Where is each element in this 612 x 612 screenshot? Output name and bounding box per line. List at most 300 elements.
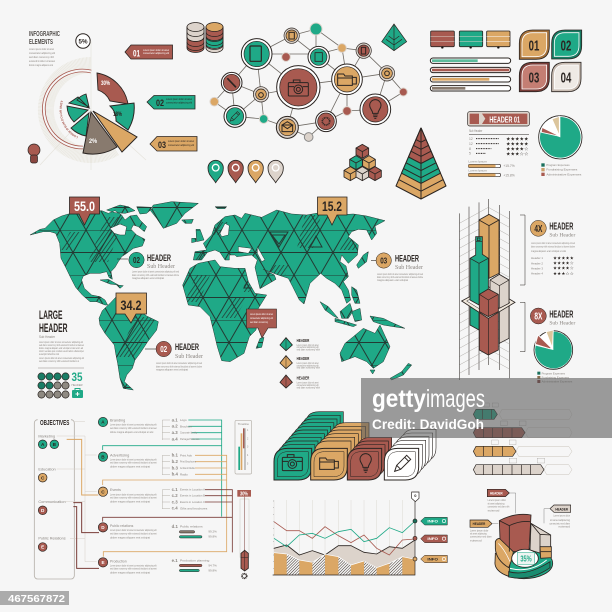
tag: header light (544, 505, 571, 529)
legend: map pyramids: consectetur adipiscing elit (297, 384, 319, 387)
node: bulb (360, 94, 391, 125)
wedge: gray 2%: 2% (89, 139, 98, 145)
node B advertising: dolore magna aliquam erat volutpat (110, 466, 150, 469)
callout: 55.0 (70, 197, 100, 225)
sub-item labels: Events in Location A (180, 488, 205, 492)
node A branding: dolore magna aliquam erat volutpat ut wisi (110, 431, 154, 434)
info tag tan: INFO (427, 557, 438, 561)
pie chart (534, 330, 573, 369)
tag: header light: consectetur sed diam (549, 523, 570, 526)
node E production: sed diam nonummy nibh euismod tincidunt ut laoreet (110, 568, 157, 571)
ratings table: +15.7% (503, 164, 515, 168)
node C events: C (101, 489, 105, 494)
node: folder (332, 64, 362, 95)
label: 4X header: 4X (534, 224, 543, 235)
objectives flow diagram (34, 417, 252, 579)
watermark banner: Credit: DavidGoh (372, 416, 484, 432)
sub-item labels: Packaged Materials (180, 437, 200, 441)
sub-item labels: Print Brochures (180, 460, 196, 464)
large header block: Lorem ipsum dolor sit amet consectetur adipiscing elit (39, 357, 84, 360)
node: gear (316, 111, 336, 132)
watermark banner: getty (372, 385, 426, 413)
leaf tile 02: 02 (561, 38, 571, 54)
large header block: HEADER (39, 323, 68, 335)
connectors (57, 420, 232, 568)
sub-item labels: Events in Location C (180, 500, 206, 504)
node E production: dolore magna aliquam erat volutpat (110, 572, 150, 575)
label: 4X header: Header 2 (531, 261, 543, 265)
label: 4X header: ★★★★☆ (553, 266, 574, 271)
node D public relations: Lorem ipsum dolor sit amet consectetur adipiscing elit (110, 529, 157, 532)
sub-item labels: b.2 (172, 459, 179, 464)
node: microphone (221, 72, 242, 93)
map label: 03 header tan: Sub Header (395, 265, 423, 271)
legend: map pyramids: HEADER (297, 356, 310, 362)
percent badge: 5%: 5% (78, 38, 88, 46)
world map (30, 201, 412, 390)
title: infographic elements: euismod tincidunt ut laoreet (29, 59, 55, 63)
sub-item labels (172, 417, 217, 572)
node D public relations: sed diam nonummy nibh euismod tincidunt ut laoreet (110, 532, 157, 535)
tag 02 (147, 96, 195, 109)
map label: 03 header tan: magna aliquam erat volutpat (377, 279, 408, 282)
map label: 03 header tan: diam nonummy nibh euismod tincidunt ut laoreet dolore (377, 276, 424, 279)
node C events: dolore magna aliquam erat volutpat (110, 501, 150, 504)
sub-item labels: c.1 (172, 487, 178, 492)
legend: map pyramids: HEADER (297, 338, 310, 344)
sub-item labels: Radio (180, 472, 188, 476)
hex row tan (473, 446, 572, 456)
callout: red text note: sed diam nonummy (250, 321, 269, 324)
node: document (308, 46, 329, 68)
node D public relations: D (101, 525, 105, 530)
ratings table: ★★★☆☆ (506, 151, 529, 157)
network diagram (208, 23, 407, 183)
ratings table: Sub Header (469, 129, 483, 133)
objectives side panel: B (53, 442, 57, 447)
tag 01: 01 (133, 48, 140, 58)
tag: header tan: HEADER (473, 521, 485, 526)
legend: map pyramids: HEADER (297, 375, 310, 381)
ratings table: ★★★★★ (506, 137, 529, 143)
legend: map pyramids: consectetur adipiscing elit (297, 346, 319, 349)
sub-item labels: e.1 (172, 558, 178, 563)
tag: header red: consectetur sed diam nibh (488, 505, 510, 508)
green bar (470, 237, 488, 310)
sub-item labels: Logo (180, 418, 187, 422)
map label: 02 header green: Sub Header (147, 264, 175, 270)
node E production (98, 558, 157, 575)
pie legend (541, 163, 582, 176)
node E production: E (101, 560, 105, 565)
node A branding: A (101, 420, 105, 425)
sub-item labels: Brochure (180, 424, 192, 428)
title: infographic elements: Lorem ipsum dolor sit amet (29, 47, 54, 51)
map label: 03 header tan (371, 253, 424, 282)
node C events (98, 487, 157, 504)
thermometer 30%: 30% (240, 491, 248, 497)
leaf tile 01 (519, 30, 549, 59)
timeline mini chart: 3 (247, 447, 249, 449)
info tag red (421, 535, 447, 543)
people icon grid with 35: 35 (72, 370, 83, 384)
3D donut chart (495, 514, 553, 579)
people icon grid with 35: HEADER (72, 384, 83, 387)
coin stacks (187, 22, 223, 52)
node C events: Events (110, 488, 121, 492)
sub-item labels: c.2 (172, 493, 178, 498)
large header block: Lorem ipsum dolor sit amet consectetur adipiscing elit (39, 341, 83, 344)
red bar (479, 289, 498, 317)
title: infographic elements (29, 29, 60, 67)
objectives side panel: A (41, 442, 45, 447)
map label: 02 header red: HEADER (175, 342, 199, 353)
map label: 02 header green: 02 (133, 255, 140, 265)
label: 4X header: Header 4 (531, 272, 543, 276)
node E production: Lorem ipsum dolor sit amet consectetur adipiscing elit (110, 564, 157, 567)
sub-item labels: Gifts and brochures (180, 506, 208, 510)
title: infographic elements: consectetur adipiscing elit (29, 51, 55, 55)
node D public relations (98, 523, 157, 539)
info tag tan (421, 555, 447, 563)
ratings table: 12 (469, 137, 473, 141)
legend: map pyramids: sed diam nonummy nibh (297, 388, 321, 390)
donut center label 35%: 35% (520, 554, 532, 564)
wedge: red 30%: 30% (101, 81, 110, 87)
ratings table: 8 (469, 147, 471, 151)
pie legend: Fundraising Expenses (546, 168, 578, 172)
label: 8X header: HEADER (549, 309, 573, 320)
objectives side panel (34, 418, 74, 579)
hex row red (473, 428, 572, 438)
map label: 02 header green (117, 252, 180, 280)
tag: header tan (470, 520, 498, 543)
timeline mini chart: 1 (247, 430, 249, 432)
timeline mini chart: 2 (247, 438, 249, 440)
image id (0, 591, 69, 605)
tag: header red: euismod (488, 510, 500, 512)
hex row green (473, 409, 572, 419)
lower bars (470, 305, 479, 330)
large header block: minim veniam quis nostrud exerci tation ullamcorper (39, 350, 84, 353)
timeline mini chart: 4 (247, 455, 249, 457)
ratings table: +15.8% (503, 173, 515, 177)
objectives side panel: Communication (38, 500, 66, 504)
light bar (490, 274, 509, 308)
map label: 02 header green: diam nonummy nibh euismod tincidunt ut laoreet dolore (132, 274, 180, 277)
callout: 34.2: 34.2 (120, 297, 142, 313)
title: infographic elements: dolore magna aliquam erat (29, 63, 53, 67)
tag 01: consectetur adipiscing elit (143, 52, 169, 55)
wedges: left green (67, 94, 89, 136)
sub-item labels: 99.2% (208, 530, 217, 534)
objectives side panel: E (41, 545, 44, 550)
title: infographic elements: ELEMENTS (29, 37, 53, 46)
info tag red: INFO (427, 537, 438, 541)
axis pin: 0 (414, 493, 417, 498)
white tile stack (384, 429, 436, 480)
isometric cube pyramid (344, 144, 381, 181)
tile stacks and line chart (273, 412, 447, 575)
people icon grid with 35 (38, 368, 84, 398)
tag: header tan: euismod (470, 541, 483, 543)
sub-item labels: Public relations (180, 525, 203, 529)
donut center label 35% (517, 552, 535, 564)
ratings table: 5 (469, 152, 471, 156)
node B advertising: B (101, 454, 105, 459)
label: 4X header: ★★★★★ (553, 255, 574, 260)
legend: map pyramids: Lorem ipsum dolor sit amet (297, 344, 319, 347)
tag 03: Lorem ipsum dolor sit amet (168, 140, 194, 143)
ratings table: Lorem Ipsum (468, 159, 488, 163)
header 01 banner: HEADER 01 (489, 114, 520, 124)
sub-item labels: Print Ads (180, 453, 192, 457)
top right: striped boxes (430, 30, 582, 177)
tag: header tan: sit amet adipiscing (470, 532, 487, 535)
location pins (208, 160, 283, 183)
callout: 55.0: 55.0 (74, 198, 95, 214)
wedge: tan (93, 111, 137, 152)
node E production: Production (110, 559, 127, 563)
objectives side panel: OBJECTIVES (40, 418, 69, 427)
leaf tile 02 (552, 30, 582, 59)
callout: 15.2 (318, 197, 347, 225)
leaf tile 04: 04 (561, 70, 572, 86)
label: 4X header (530, 220, 576, 276)
label: 4X header: Header 3 (531, 266, 543, 270)
label: 4X header: magna aliquam erat volutpat ut wisi (531, 250, 566, 253)
sub-item labels: a.2 (172, 424, 178, 429)
node B advertising: Advertising (110, 453, 129, 457)
legend: map pyramids: Lorem ipsum dolor sit amet (297, 362, 319, 365)
callout: red text note: consectetur adipiscing elit (250, 317, 273, 320)
info tag green: INFO (427, 519, 438, 523)
green tile stack (274, 412, 343, 480)
pie legend: Program Expenses (542, 371, 565, 375)
tag: header tan: Lorem ipsum dolor (470, 530, 489, 533)
tag 01 (125, 45, 172, 59)
leaf tile 03: 03 (529, 70, 539, 86)
node: camera (277, 66, 320, 109)
node: book (241, 39, 272, 69)
tag 02: 02 (156, 98, 164, 108)
node B advertising (98, 452, 157, 469)
line chart (273, 492, 447, 575)
pie legend: Administrative Expenses (546, 172, 582, 176)
sub-item labels: Ambient Media (180, 466, 195, 470)
watermark banner (361, 378, 612, 438)
sub-item labels: 94.7% (208, 563, 217, 567)
legend: map pyramids: Lorem ipsum dolor sit amet (297, 382, 319, 385)
tag: header red: HEADER (490, 490, 503, 495)
timeline mini chart: Timeline (238, 422, 249, 426)
label: 4X header: HEADER (549, 222, 573, 233)
map label: 03 header tan: HEADER (395, 254, 419, 264)
legend: map pyramids (280, 338, 321, 390)
label: 4X header: ★★★★☆ (553, 261, 574, 266)
small nodes (210, 23, 407, 141)
sub-item labels: a.3 (172, 430, 178, 435)
stepped pyramid (396, 128, 446, 199)
node D public relations: Public relations (110, 524, 133, 528)
objectives side panel: C (41, 475, 45, 480)
map label: 02 header green: magna aliquam erat volutpat (132, 277, 164, 280)
timeline mini chart: 5 (247, 463, 249, 465)
map label: 03 header tan: 03 (380, 256, 387, 266)
label: 4X header: Lorem ipsum dolor sit amet consectetur adipiscing elit sed (531, 242, 576, 245)
objectives side panel: D (41, 508, 45, 513)
large header block: LARGE (39, 310, 63, 322)
pie chart expenses (539, 116, 582, 159)
sub-item labels: 99.8% (208, 535, 217, 539)
node C events: Lorem ipsum dolor sit amet consectetur adipiscing elit (110, 493, 157, 496)
thermometer 30% (237, 490, 251, 578)
sub-item labels: b.1 (172, 453, 179, 458)
node B advertising: sed diam nonummy nibh euismod tincidunt ut laoreet (110, 462, 157, 465)
node A branding (98, 417, 157, 434)
leaf tile 01: 01 (529, 38, 539, 54)
sub-item labels: a.4 (172, 436, 178, 441)
tag: header light: HEADER (555, 506, 568, 511)
sub-item labels: Production planning (180, 559, 210, 563)
polar pie chart (38, 41, 146, 170)
leaf tile 04 (552, 62, 581, 92)
info tag green (421, 517, 447, 525)
platform (462, 287, 515, 318)
large header block: Sub Header (39, 335, 56, 339)
tag 03: 03 (158, 140, 166, 150)
map label: 02 header red: magna aliquam erat volutpat (156, 368, 188, 372)
sub-item labels: b.4 (172, 472, 179, 477)
callout: red text note: Lorem ipsum dolor sit amet (250, 313, 273, 316)
progress bars (179, 531, 202, 572)
progress bars (430, 58, 511, 91)
legend: map pyramids: sed diam nonummy nibh (297, 368, 321, 370)
node D public relations: dolore magna aliquam erat volutpat (110, 536, 150, 539)
sub-item labels: 99.8% (208, 568, 217, 572)
sub-item labels: Events in Location B (180, 494, 205, 498)
tag: header light: Lorem ipsum dolor (553, 515, 570, 518)
large header block: sed diam nonummy nibh euismod tincidunt ut (39, 360, 79, 363)
tan tile stack (311, 423, 369, 480)
small pyramid (382, 24, 407, 51)
sub-item labels: c.4 (172, 506, 178, 511)
title: infographic elements: INFOGRAPHIC (29, 29, 60, 38)
label: 4X header: ★★★☆☆ (553, 271, 574, 276)
sub-item labels: b.3 (172, 465, 179, 470)
node A branding: Lorem ipsum dolor sit amet consectetur adipiscing elit (110, 424, 157, 427)
objectives side panel: Education (38, 467, 56, 471)
pie legend: Program Expenses (546, 163, 570, 167)
tag 01: Lorem ipsum dolor sit amet (143, 49, 169, 52)
title: infographic elements: sed diam nonummy nibh (29, 55, 54, 59)
sub-item labels: d.1 (172, 524, 179, 529)
header 01 banner (468, 112, 529, 126)
map label: 02 header red: Lorem ipsum dolor sit amet consectetur adipiscing elit sed (156, 362, 203, 365)
callout: red text note (246, 309, 276, 338)
callout: 15.2: 15.2 (322, 198, 342, 214)
map label: 02 header red: diam nonummy nibh euismod tincidunt ut laoreet dolore (156, 366, 203, 368)
timeline mini chart (235, 420, 252, 474)
label: 4X header: Header 1 (531, 256, 543, 260)
image id: 467567872 (8, 593, 65, 605)
tag: header light: sit amet adipiscing (550, 519, 571, 522)
wedge: green 18%: 18% (113, 112, 122, 118)
polar pie chart: LOREM IPSUM DOLOR AMET (60, 100, 78, 138)
tan bar (479, 214, 499, 278)
percent badge: 5% (76, 34, 90, 48)
objectives side panel: Marketing (38, 434, 55, 438)
tag 03 (150, 136, 197, 151)
node B advertising: Lorem ipsum dolor sit amet consectetur adipiscing elit (110, 458, 157, 461)
large header block (39, 310, 84, 363)
map label: 03 header tan: Lorem ipsum dolor sit amet consectetur adipiscing elit sed (377, 273, 424, 276)
small value labels (484, 403, 545, 463)
ratings table: 12 (469, 142, 473, 146)
pie legend: Administrative Expenses (542, 380, 573, 384)
map label: 02 header red: Sub Header (175, 354, 203, 360)
callout: 34.2 (116, 293, 146, 323)
tag: header red: Lorem ipsum dolor (488, 499, 506, 502)
legend: map pyramids: consectetur adipiscing elit (297, 365, 319, 368)
sub-item labels: a.1 (172, 417, 178, 422)
large header block: sed diam nonummy nibh euismod tincidunt ut laoreet (39, 344, 84, 347)
icon: light bulb (28, 144, 40, 163)
sub-item labels: Corporate identity (180, 431, 198, 435)
ratings table: Lorem Ipsum (468, 168, 488, 172)
ratings table: ★★★★☆ (506, 147, 529, 153)
map label: 02 header red (145, 341, 203, 372)
tag 03: consectetur adipiscing elit (168, 144, 194, 147)
map label: 02 header red: 02 (160, 344, 167, 354)
label: 4X header: Sub Header (549, 232, 575, 238)
tag 02: Lorem ipsum dolor sit amet (166, 98, 192, 101)
tag 02: consectetur adipiscing elit (166, 102, 192, 104)
map label: 02 header green: Lorem ipsum dolor sit amet consectetur adipiscing elit sed (132, 270, 180, 274)
tag: header tan: consectetur sed diam (470, 535, 492, 538)
hex row light (473, 465, 572, 475)
watermark banner: images (426, 385, 485, 413)
node: pencil (224, 105, 246, 127)
isometric bar chart (459, 199, 576, 384)
large header block: suscipit lobortis nisl (39, 353, 59, 356)
hexagon progress rows and 3D donut (470, 403, 572, 579)
pie legend: Fundraising Expenses (542, 376, 569, 380)
node C events: sed diam nonummy nibh euismod tincidunt ut laoreet (110, 497, 157, 500)
map label: 02 header green: HEADER (147, 253, 171, 264)
node A branding: Branding (110, 419, 125, 423)
ratings table (468, 129, 529, 177)
tag: header light: euismod (558, 527, 571, 529)
node A branding: sed diam nonummy nibh euismod tincidunt ut laoreet (110, 427, 157, 430)
ratings table: ★★★★★ (506, 142, 529, 148)
label: 4X header: diam nonummy nibh euismod tincidunt ut laoreet dolore (531, 245, 576, 248)
objectives side panel: Public Relations (38, 537, 66, 541)
tag: header red: sit amet adipiscing (488, 502, 505, 505)
label: 8X header: 8X (534, 312, 543, 323)
node: mail (276, 116, 298, 138)
pie legend (537, 371, 573, 384)
leaf tile 03 (519, 62, 549, 92)
red tile stack (347, 437, 392, 480)
tag: header red (487, 489, 516, 513)
legend: map pyramids: sed diam nonummy nibh (297, 350, 321, 352)
axis pin (412, 492, 419, 502)
label: 8X header: Sub Header (549, 320, 575, 326)
sub-item labels: c.3 (172, 499, 178, 504)
label: 8X header (530, 308, 575, 326)
large header block: dolore magna aliquam erat volutpat ut wisi enim ad (39, 347, 84, 350)
